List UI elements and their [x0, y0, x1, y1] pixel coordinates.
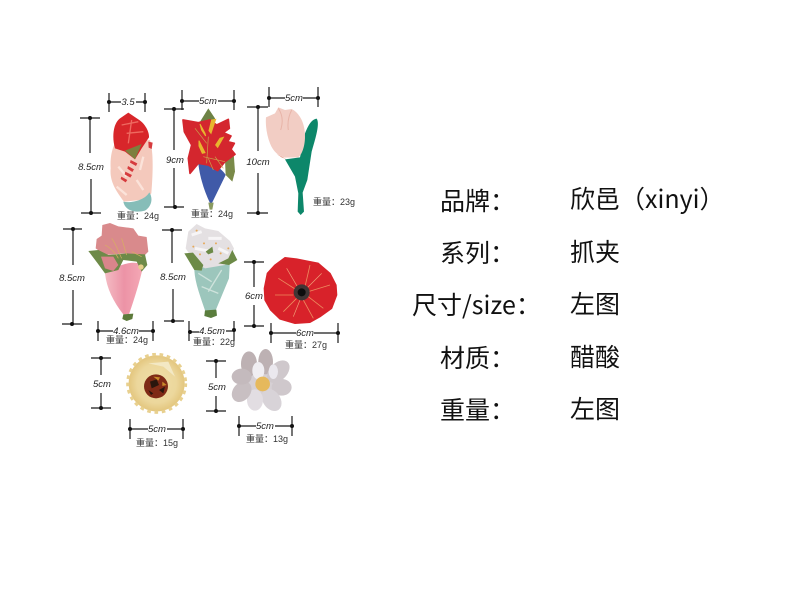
dimension: clip 5 width: 4.5cm	[199, 326, 225, 337]
dimension: clip 1 height	[78, 116, 104, 215]
dimension: clip 6 height	[244, 260, 264, 328]
dimension: clip 6 width	[269, 323, 340, 343]
dimension: clip 5 width	[188, 321, 236, 341]
weight: clip 3: 重量：23g	[313, 196, 355, 207]
dimension: clip 7 width	[128, 419, 185, 439]
dimension: clip 4 width: 4.6cm	[113, 326, 139, 337]
dimension: clip 6 width: 6cm	[296, 328, 314, 339]
dimension: clip 1 width	[107, 93, 147, 112]
spec label: material: 材质：	[440, 339, 515, 375]
dimension: clip 4 height: 8.5cm	[59, 273, 85, 284]
dimension: clip 1 width: 3.5	[121, 97, 135, 108]
weight: clip 4: 重量：24g	[106, 334, 148, 345]
weight: clip 7: 重量：15g	[136, 437, 178, 448]
dimension: clip 7 height	[91, 356, 111, 410]
hair clip: white flowers in teal wrap	[184, 224, 237, 318]
hair clip: grey-white daisy	[228, 349, 294, 415]
spec label: brand: 品牌：	[440, 182, 515, 218]
dimension: clip 7 height: 5cm	[93, 379, 111, 390]
dimension: clip 5 height: 8.5cm	[160, 272, 186, 283]
hair clip: red poppy	[264, 258, 337, 323]
dimension: clip 4 width	[96, 321, 155, 341]
dimension: clip 5 height	[160, 228, 186, 323]
dimension: clip 2 height: 9cm	[166, 155, 184, 166]
spec value: series: 抓夹	[570, 233, 620, 269]
weight: clip 5: 重量：22g	[193, 336, 235, 347]
spec table	[412, 180, 724, 427]
dimension: clip 2 width	[180, 90, 236, 110]
hair clip: yellow sunflower	[128, 354, 186, 412]
hair clip: red lily with blue base	[183, 108, 235, 210]
dimension: clip 6 height: 6cm	[245, 291, 263, 302]
weight: clip 6: 重量：27g	[285, 339, 327, 350]
spec value: size: 左图	[570, 285, 620, 321]
dimension: clip 3 height: 10cm	[246, 157, 270, 168]
weight: clip 1: 重量：24g	[117, 210, 159, 221]
dimension: clip 7 width: 5cm	[148, 424, 166, 435]
dimension: clip 3 width: 5cm	[285, 93, 303, 104]
dimension: clip 3 width	[267, 87, 320, 107]
dimension: clip 8 width	[237, 416, 294, 436]
weight: clip 8: 重量：13g	[246, 433, 288, 444]
dimension: clip 3 height	[246, 105, 270, 215]
dimension: clip 8 width: 5cm	[256, 421, 274, 432]
spec value: weight: 左图	[570, 390, 620, 426]
spec label: weight: 重量：	[440, 391, 515, 427]
spec label: size: 尺寸/size：	[412, 286, 541, 322]
dimension: clip 1 height: 8.5cm	[78, 162, 104, 173]
hair clip: pink bouquet	[88, 223, 148, 321]
hair clip: red flower in hand	[111, 113, 153, 212]
dimension: clip 8 height	[206, 359, 226, 413]
weight: clip 2: 重量：24g	[191, 208, 233, 219]
dimension: clip 4 height	[59, 227, 85, 326]
dimension: clip 2 height	[164, 107, 184, 209]
spec label: series: 系列：	[440, 234, 515, 270]
spec value: brand: 欣邑（xinyi）	[570, 180, 724, 216]
spec value: material: 醋酸	[570, 338, 620, 374]
dimension: clip 8 height: 5cm	[208, 382, 226, 393]
dimension: clip 2 width: 5cm	[199, 96, 217, 107]
hair clip: pink tulip with green stem	[266, 107, 318, 215]
